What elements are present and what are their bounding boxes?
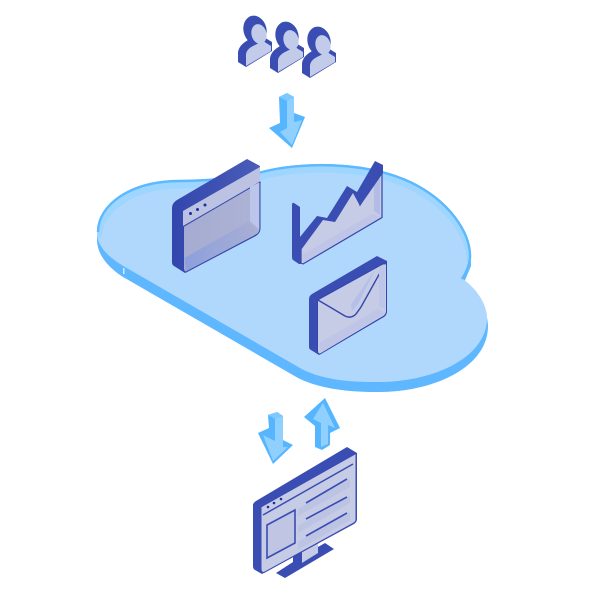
monitor body (253, 447, 357, 574)
envelope shading (351, 268, 376, 311)
window dots (189, 204, 206, 215)
chart dark ridge line (292, 161, 383, 264)
user 3 (302, 24, 336, 78)
isometric cloud services infographic (96, 16, 488, 578)
window panel icon (172, 159, 260, 273)
monitor title bar line (263, 464, 353, 515)
cloud rim highlight (97, 168, 471, 262)
user 2 (270, 19, 304, 73)
chart right shade (374, 172, 380, 215)
window title bar (183, 167, 260, 226)
users group icon (238, 13, 336, 78)
monitor content shade (298, 479, 350, 550)
monitor screen (261, 454, 356, 572)
window content area (184, 182, 260, 272)
cloud top face (97, 164, 487, 382)
window body (172, 159, 260, 273)
envelope icon (309, 256, 387, 355)
envelope right shade (379, 264, 385, 309)
arrow: down from users to cloud (269, 93, 305, 148)
arrow: up from monitor to cloud (304, 398, 340, 450)
monitor text lines (306, 479, 347, 536)
monitor content box (267, 510, 295, 558)
envelope body (309, 256, 387, 355)
window right shade (250, 182, 259, 229)
user 1 (238, 13, 272, 67)
cloud side thickness (97, 172, 488, 392)
cloud platform (97, 164, 488, 392)
envelope bottom shade (319, 309, 385, 353)
monitor dots (267, 498, 282, 508)
envelope flap line (318, 262, 386, 317)
window bottom shade (184, 222, 258, 271)
arrow: down from cloud to monitor (258, 412, 293, 464)
cloud outline (98, 165, 470, 279)
chart area (301, 167, 382, 264)
monitor icon (253, 447, 357, 578)
cloud edge mark (123, 268, 124, 274)
envelope front (318, 262, 386, 354)
chart bottom shade (302, 214, 381, 263)
area chart icon (292, 161, 383, 264)
monitor stand (276, 540, 334, 578)
